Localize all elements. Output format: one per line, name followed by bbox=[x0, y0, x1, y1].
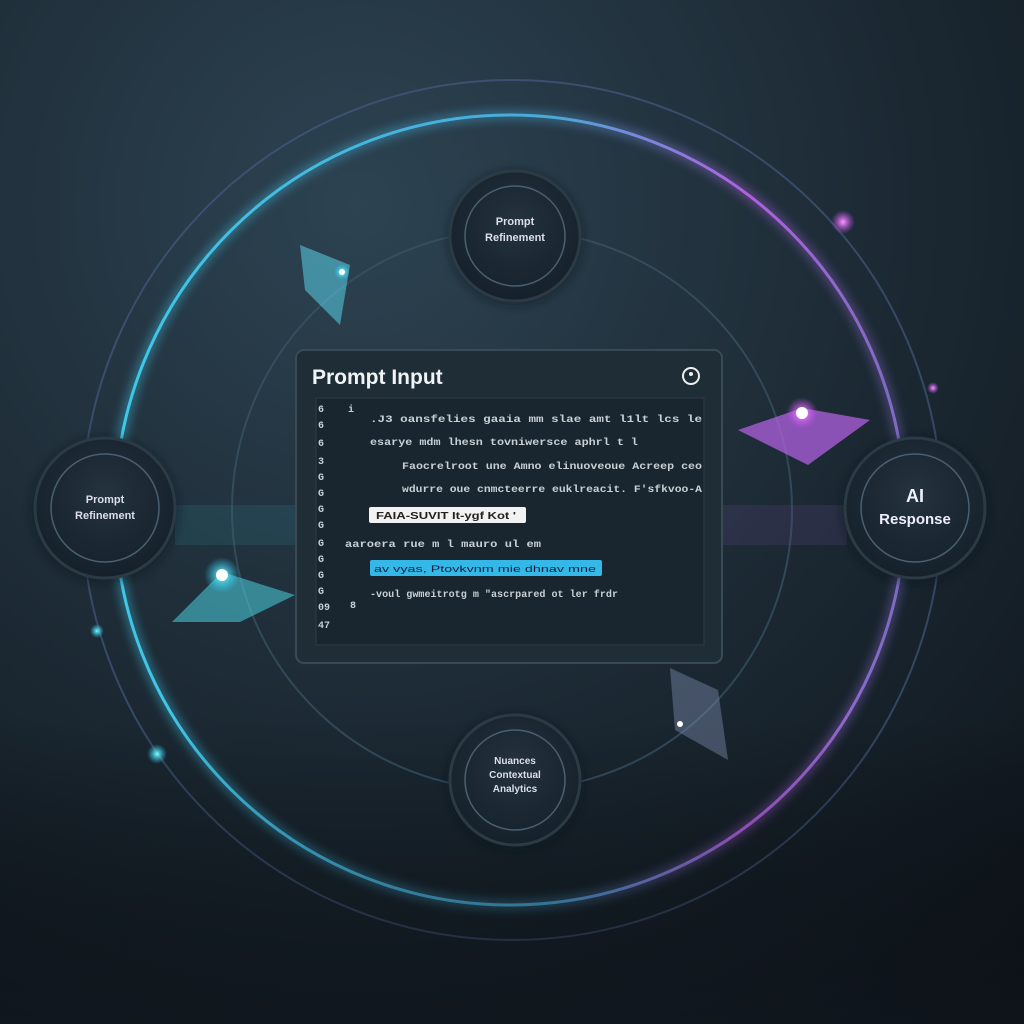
node: bottom: Nuances bbox=[494, 756, 536, 767]
node: top: Prompt bbox=[496, 216, 535, 228]
node: bottom bbox=[449, 715, 581, 848]
code area: Faocrelroot une Amno elinuoveoue Acreep ceo bbox=[402, 461, 702, 473]
node: right: Response bbox=[879, 511, 951, 528]
main glowing ring bbox=[115, 115, 905, 905]
node: left: Refinement bbox=[75, 510, 135, 522]
highlight: cyan bbox=[370, 560, 602, 576]
code area: 09 bbox=[318, 603, 330, 614]
heading: Prompt Input bbox=[312, 366, 443, 389]
code area: G bbox=[318, 571, 324, 582]
node: right: AI bbox=[906, 486, 924, 506]
code area: i bbox=[348, 404, 354, 416]
code area: .J3 oansfelies gaaia mm slae amt l1lt lcs le bbox=[370, 414, 702, 426]
code area: G bbox=[318, 587, 324, 598]
code area: 47 bbox=[318, 621, 330, 632]
inner ring bbox=[232, 230, 792, 790]
code area: G bbox=[318, 489, 324, 500]
code area: 8 bbox=[350, 601, 356, 612]
node: right bbox=[843, 438, 987, 582]
highlight: white: FAIA-SUVIT It-ygf Kot ' bbox=[376, 511, 516, 522]
code area: 6 bbox=[318, 421, 324, 432]
connecting bands bbox=[175, 505, 300, 545]
node: bottom: Analytics bbox=[493, 784, 538, 795]
outer ring bbox=[82, 80, 942, 940]
panel: prompt input bbox=[296, 350, 722, 663]
shard: bottom right bbox=[670, 668, 728, 760]
code area: G bbox=[318, 521, 324, 532]
code area: esarye mdm lhesn tovniwersce aphrl t l bbox=[370, 437, 638, 449]
node: bottom: Contextual bbox=[489, 770, 541, 781]
code area: 3 bbox=[318, 457, 324, 468]
highlight: white bbox=[369, 507, 526, 523]
code area: G bbox=[318, 505, 324, 516]
code area: 6 bbox=[318, 405, 324, 416]
shard: left bbox=[172, 557, 295, 622]
shard: right purple bbox=[738, 397, 870, 465]
node: top bbox=[449, 171, 581, 304]
code area: G bbox=[318, 539, 324, 550]
node: top: Refinement bbox=[485, 232, 545, 244]
glow dots bbox=[90, 210, 939, 764]
code area: G bbox=[318, 555, 324, 566]
code area: G bbox=[318, 473, 324, 484]
node: left bbox=[33, 438, 177, 582]
code area: -voul gwmeitrotg m "ascrpared ot ler frdr bbox=[370, 589, 618, 601]
code area: aaroera rue m l mauro ul em bbox=[345, 539, 541, 551]
node: left: Prompt bbox=[86, 494, 125, 506]
highlight: cyan: av vyas, Ptovkvnm mie dhnav mne bbox=[374, 564, 596, 575]
code area: 6 bbox=[318, 439, 324, 450]
shard: top left bbox=[300, 245, 350, 325]
code area: wdurre oue cnmcteerre euklreacit. F'sfkvoo-A bbox=[402, 484, 702, 496]
code area bbox=[316, 398, 704, 645]
icon: info bbox=[683, 368, 699, 384]
